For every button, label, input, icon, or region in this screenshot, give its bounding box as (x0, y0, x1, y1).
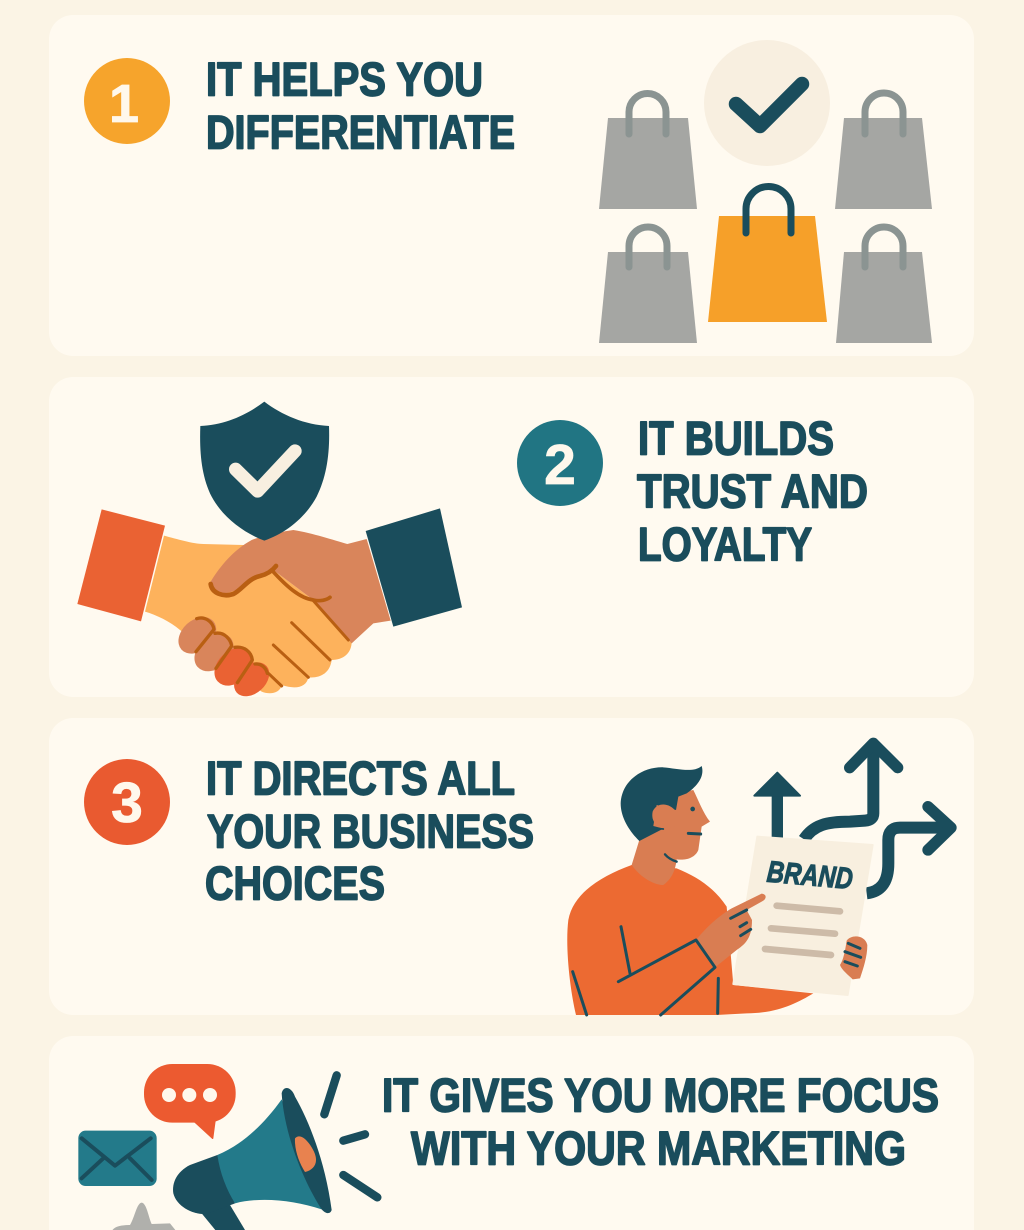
holding hand (840, 936, 867, 979)
heading 2: TRUST AND (637, 464, 868, 518)
heading 4 (382, 1068, 939, 1174)
heading 4: WITH YOUR MARKETING (411, 1122, 906, 1174)
heading 3: CHOICES (205, 856, 385, 910)
heading 2 (637, 412, 868, 570)
sound rays (324, 1075, 377, 1197)
right hand (210, 530, 391, 643)
number badge 2 (517, 420, 603, 506)
panel: 3 it directs all your business choices (49, 718, 974, 1015)
megaphone handle (202, 1205, 246, 1230)
torso (567, 865, 813, 1015)
number badge 2: 2 (544, 433, 576, 497)
clothing and finger lines (573, 910, 861, 1015)
icon: grey bag bottom left (599, 227, 697, 343)
number badge 1 (84, 58, 170, 144)
icon: grey bag top left (599, 94, 697, 209)
left hand (145, 536, 352, 693)
megaphone inner (295, 1136, 316, 1172)
face details (655, 807, 701, 862)
neck and face (632, 790, 710, 885)
star (112, 1203, 177, 1230)
icon: grey bag top right (835, 93, 932, 209)
ear (652, 805, 676, 828)
heading 2: IT BUILDS (638, 412, 834, 464)
heading 3: YOUR BUSINESS (207, 804, 534, 858)
document title: BRAND (766, 856, 854, 896)
document lines (765, 906, 840, 955)
megaphone rim (282, 1088, 332, 1213)
illustration: man holding brand document (567, 743, 951, 1015)
heading 3: IT DIRECTS ALL (206, 752, 515, 804)
right cuff (366, 508, 462, 627)
number badge 3: 3 (111, 771, 143, 835)
shield (200, 402, 329, 541)
panel: 1 it helps you differentiate (49, 15, 974, 356)
illustration: megaphone, message and mail (78, 1064, 377, 1230)
shield check (236, 451, 295, 491)
direction arrows (754, 743, 951, 893)
icon: grey bag bottom right (836, 227, 932, 343)
illustration: handshake (77, 402, 462, 703)
heading 2: LOYALTY (638, 518, 812, 570)
icon: orange bag (708, 186, 827, 322)
megaphone back (173, 1155, 235, 1214)
left cuff (77, 509, 165, 621)
heading 3 (205, 752, 534, 910)
megaphone cone (217, 1099, 322, 1209)
heading 1: IT HELPS YOU (206, 52, 483, 106)
number badge 3 (84, 759, 170, 845)
hand contour lines (196, 566, 348, 686)
heading 1 (206, 52, 515, 158)
panel: 4 it gives you more focus with your marketing (49, 1036, 974, 1230)
icon: check mark circle (704, 40, 830, 166)
envelope (78, 1131, 157, 1186)
heading 1: DIFFERENTIATE (206, 106, 515, 158)
heading 4: IT GIVES YOU MORE FOCUS (382, 1068, 939, 1122)
speech bubble (144, 1064, 236, 1138)
hair (621, 766, 702, 841)
fingers (171, 610, 276, 703)
number badge 1: 1 (109, 74, 139, 134)
panel: 2 it builds trust and loyalty (49, 377, 974, 703)
pointing hand (697, 894, 766, 967)
document (733, 837, 873, 995)
